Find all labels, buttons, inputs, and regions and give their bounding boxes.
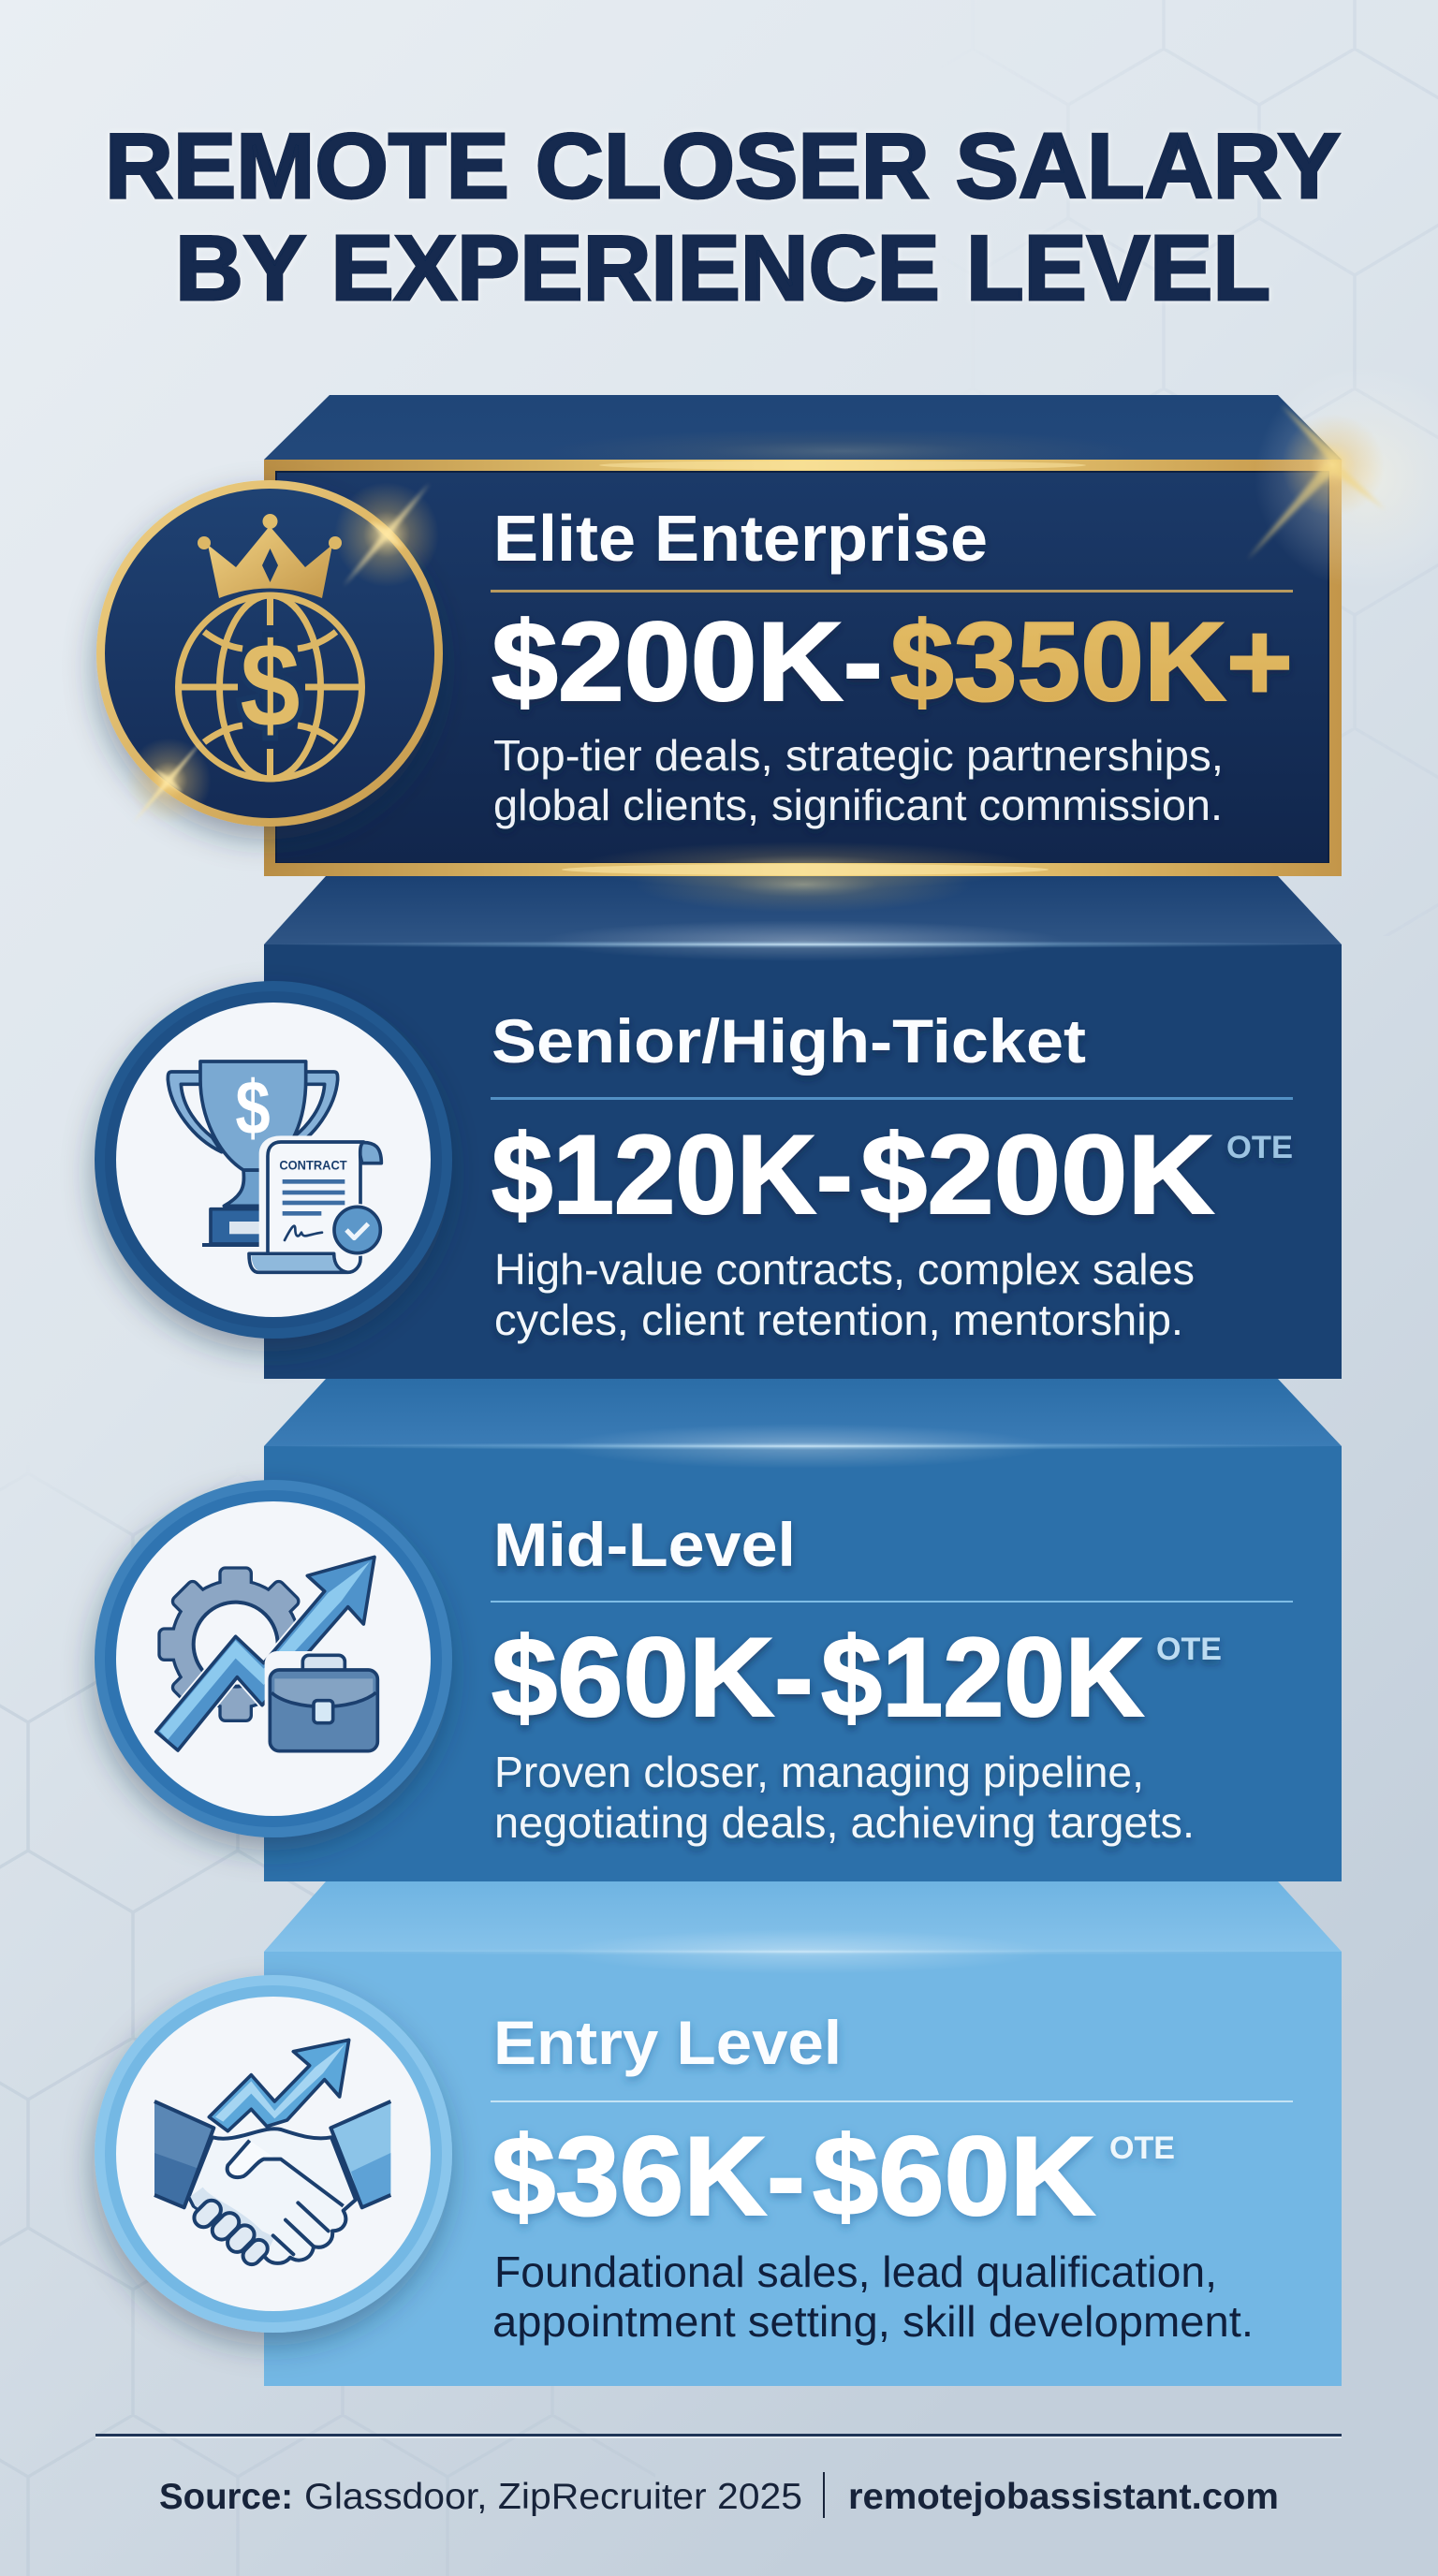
icon: briefcase — [265, 1651, 383, 1756]
panel: entry level — [264, 1881, 1342, 2386]
sparkle: badge top right — [303, 449, 470, 620]
icon: handshake — [189, 2129, 356, 2268]
mid-level heading: Mid-Level — [493, 1510, 796, 1579]
icon: growth arrow — [156, 1557, 374, 1750]
entry level description: Foundational sales, lead qualification, — [494, 2247, 1217, 2296]
icon badge: elite crown and globe — [96, 449, 470, 850]
entry level description — [492, 2247, 1254, 2346]
senior heading: Senior/High-Ticket — [492, 1006, 1086, 1076]
icon badge: trophy and contract: $ — [235, 1066, 271, 1151]
icon: globe with dollar: $ — [240, 619, 300, 753]
icon: globe with dollar — [178, 595, 361, 779]
senior top bevel — [264, 876, 1342, 944]
mid-level top bevel — [264, 1379, 1342, 1446]
website text: remotejobassistant.com — [848, 2477, 1279, 2517]
icon badge: gear arrow and briefcase — [95, 1480, 452, 1837]
senior salary — [492, 1112, 1293, 1237]
title: REMOTE CLOSER SALARY — [105, 114, 1341, 217]
mid-level description: negotiating deals, achieving targets. — [494, 1798, 1195, 1847]
source text: Source: — [159, 2477, 293, 2517]
icon: contract — [249, 1135, 387, 1280]
elite salary: $350K+ — [890, 599, 1293, 724]
entry level salary: OTE — [1109, 2130, 1175, 2166]
title — [105, 114, 1341, 319]
entry level description: appointment setting, skill development. — [492, 2297, 1254, 2346]
icon: left cuff — [154, 2101, 213, 2207]
footer: Glassdoor, ZipRecruiter 2025 — [304, 2477, 802, 2517]
entry level salary: $60K — [813, 2114, 1095, 2239]
entry level heading: Entry Level — [493, 2008, 842, 2077]
mid-level salary: OTE — [1156, 1632, 1222, 1667]
panel: mid-level — [264, 1379, 1342, 1881]
elite salary: $200K- — [492, 599, 883, 724]
mid-level description — [494, 1748, 1195, 1847]
icon: gear — [161, 1570, 311, 1720]
elite salary — [492, 599, 1293, 724]
sparkle: badge bottom left — [101, 711, 236, 850]
senior description: High-value contracts, complex sales — [494, 1245, 1195, 1294]
icon badge: trophy and contract: CONTRACT — [279, 1157, 347, 1172]
senior salary: $120K- — [492, 1112, 853, 1237]
title: BY EXPERIENCE LEVEL — [175, 216, 1270, 319]
icon: rising arrow — [209, 2040, 349, 2131]
entry level salary — [492, 2114, 1175, 2239]
elite top bevel — [264, 395, 1342, 460]
senior description: cycles, client retention, mentorship. — [494, 1295, 1183, 1344]
icon: crown — [198, 514, 342, 598]
elite heading: Elite Enterprise — [493, 502, 988, 575]
senior salary: $200K — [860, 1112, 1214, 1237]
elite description — [493, 731, 1224, 829]
elite description: Top-tier deals, strategic partnerships, — [493, 731, 1224, 780]
mid-level salary: $120K — [821, 1615, 1144, 1740]
sparkle: top right corner — [1247, 365, 1438, 590]
mid-level salary: $60K- — [492, 1615, 814, 1740]
mid-level salary — [492, 1615, 1222, 1740]
elite gold frame — [264, 460, 1342, 876]
elite description: global clients, significant commission. — [493, 781, 1223, 829]
senior description — [494, 1245, 1195, 1344]
icon badge: trophy and contract — [95, 981, 452, 1339]
entry level salary: $36K- — [492, 2114, 805, 2239]
icon: check badge — [331, 1204, 384, 1256]
panel: senior high-ticket — [264, 856, 1342, 1379]
footer — [95, 2434, 1342, 2518]
icon badge: handshake and arrow — [95, 1975, 452, 2333]
icon: right cuff — [330, 2101, 390, 2207]
mid-level description: Proven closer, managing pipeline, — [494, 1748, 1144, 1796]
panel: elite enterprise — [264, 365, 1438, 890]
entry level top bevel — [264, 1881, 1342, 1952]
senior salary: OTE — [1226, 1130, 1293, 1165]
icon: trophy — [168, 1061, 338, 1245]
